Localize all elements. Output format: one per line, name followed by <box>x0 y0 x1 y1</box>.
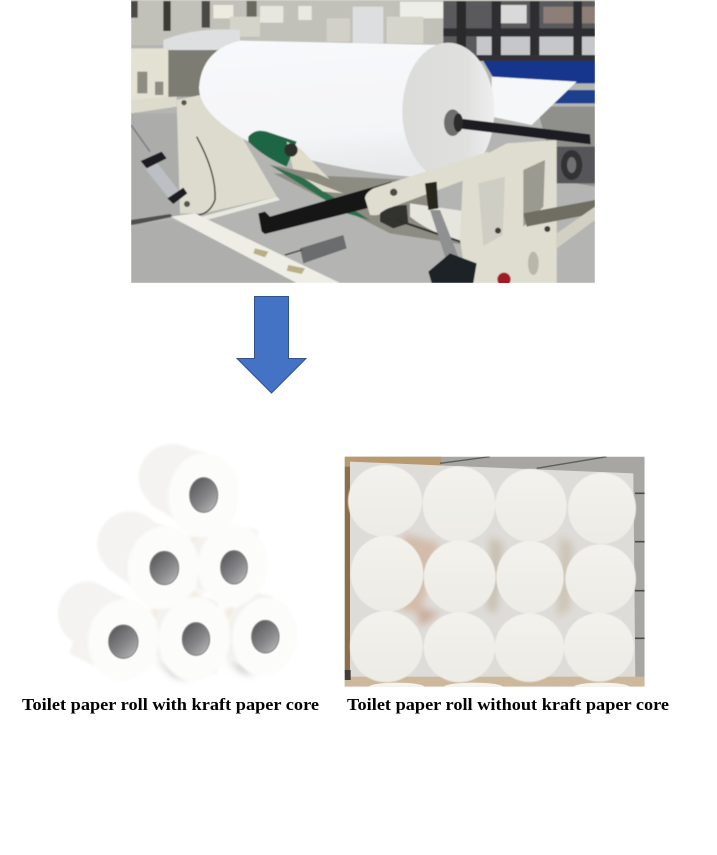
white floor rail <box>171 213 340 283</box>
wall and plastic backdrop <box>345 457 645 692</box>
roll: middle right <box>193 521 271 610</box>
row 3 rolls <box>350 611 634 682</box>
roll body <box>199 41 450 177</box>
row 2 rolls <box>351 536 636 614</box>
caption: without kraft paper core: Toilet paper roll without kraft paper core <box>347 695 669 714</box>
paper web <box>492 77 577 125</box>
left machine plate <box>177 95 277 213</box>
roll: top <box>139 444 244 541</box>
green conveyor <box>248 131 297 167</box>
roll: bottom left <box>58 581 164 686</box>
photo: stack of six rolls with kraft paper core <box>58 444 302 686</box>
air cylinder <box>145 162 179 198</box>
roll: middle left <box>97 511 203 612</box>
roll end face <box>402 43 494 179</box>
contact shadows <box>151 536 257 681</box>
photo: packed rolls without kraft paper core <box>345 457 645 692</box>
left floor <box>132 152 178 219</box>
row 1 rolls <box>348 465 636 544</box>
arrow: down <box>237 296 306 393</box>
piston <box>425 182 438 210</box>
photo: jumbo paper roll on rewinding machine <box>131 0 595 286</box>
black bar <box>258 182 393 234</box>
front machine frame <box>460 140 557 283</box>
factory background <box>131 0 595 283</box>
roll: bottom right <box>225 593 302 680</box>
small cylinder on floor <box>300 235 347 263</box>
roll: bottom middle <box>155 594 234 684</box>
shaft <box>458 118 591 144</box>
caption: with kraft paper core: Toilet paper roll with kraft paper core <box>22 695 319 714</box>
core holes <box>109 478 279 658</box>
front machine arm <box>365 152 492 215</box>
under-roll shadow area <box>274 173 461 244</box>
